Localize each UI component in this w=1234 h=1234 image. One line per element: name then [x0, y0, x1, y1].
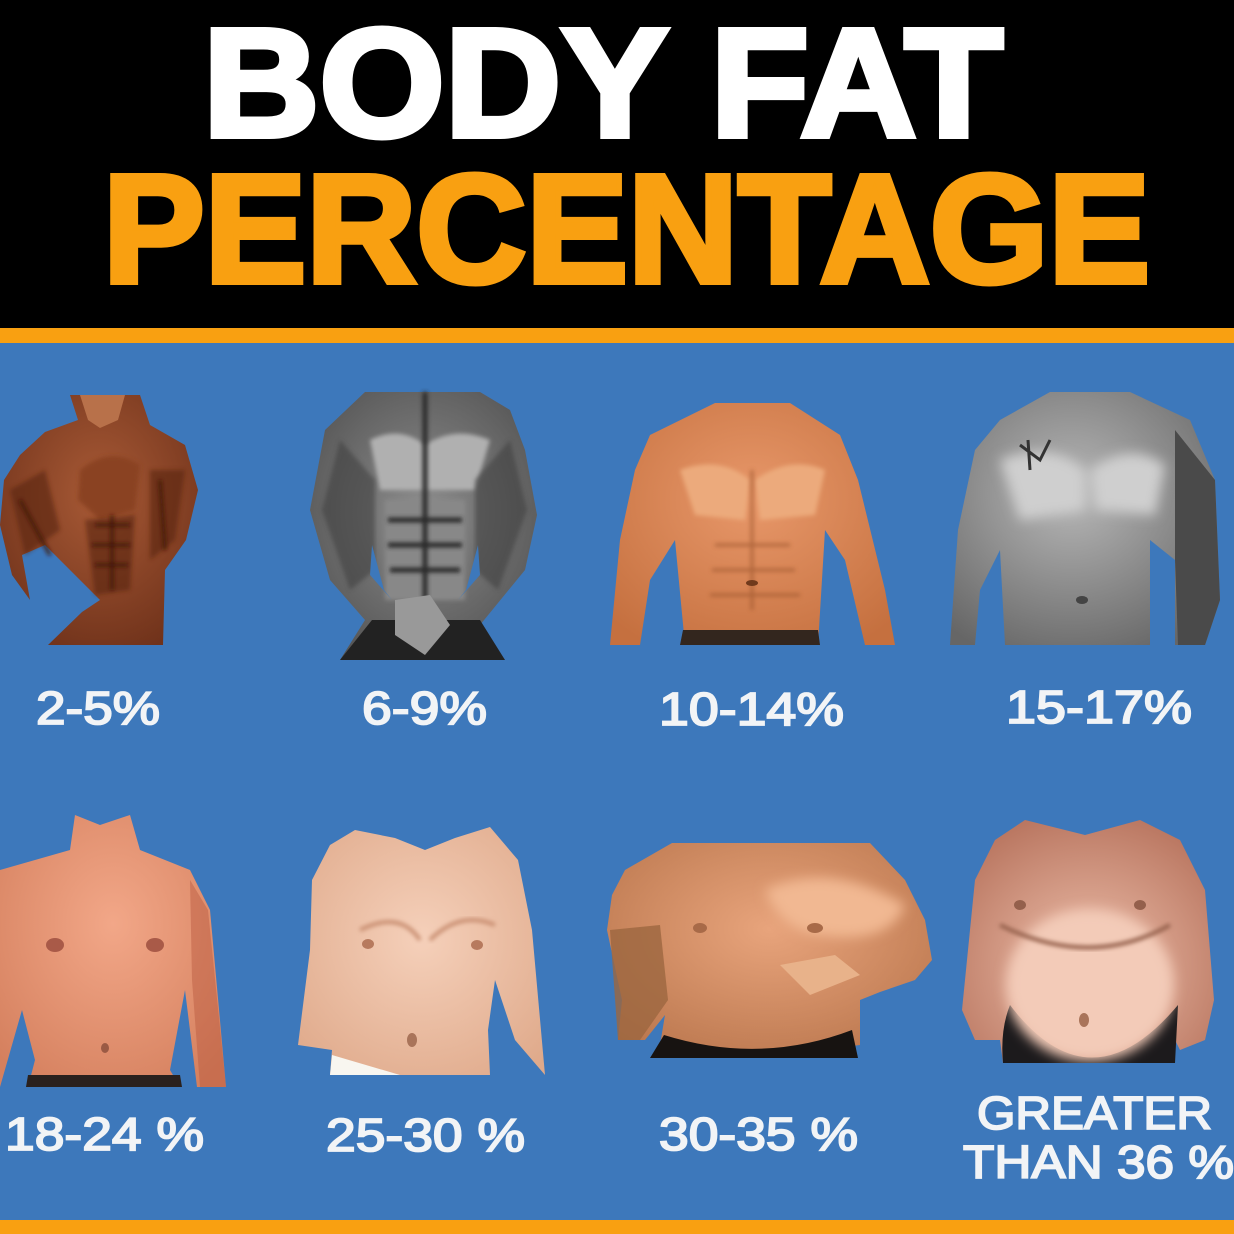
label: greater than 36 %: [963, 1087, 1234, 1188]
title: percentage: PERCENTAGE: [103, 143, 1150, 315]
label: greater than 36 %: THAN 36 %: [963, 1136, 1234, 1188]
header band: [0, 0, 1234, 328]
footer band: [0, 1220, 1234, 1234]
label: greater than 36 %: GREATER: [977, 1087, 1212, 1139]
label: 15-17%: 15-17%: [1006, 681, 1192, 733]
navel: [746, 580, 758, 586]
figure: 6-9% torso: [310, 392, 537, 660]
figure: 15-17% torso: [950, 392, 1220, 645]
figure: over 36% torso: [962, 820, 1214, 1063]
figure: 25-30% torso: [298, 827, 545, 1075]
header divider: [0, 328, 1234, 343]
label: 6-9%: 6-9%: [362, 682, 487, 734]
title: body fat: BODY FAT: [203, 0, 1003, 169]
figure: 2-5% torso: [0, 395, 198, 645]
label: 18-24 %: 18-24 %: [5, 1108, 204, 1160]
figure: 10-14% torso: [610, 403, 895, 645]
label: 30-35 %: 30-35 %: [659, 1108, 858, 1160]
label: 2-5%: 2-5%: [36, 682, 160, 734]
arm gaps: [370, 545, 480, 600]
label: 10-14%: 10-14%: [659, 683, 844, 735]
figure: 30-35% torso: [607, 843, 932, 1058]
label: 25-30 %: 25-30 %: [326, 1109, 525, 1161]
figure: 18-24% torso: [0, 815, 226, 1087]
